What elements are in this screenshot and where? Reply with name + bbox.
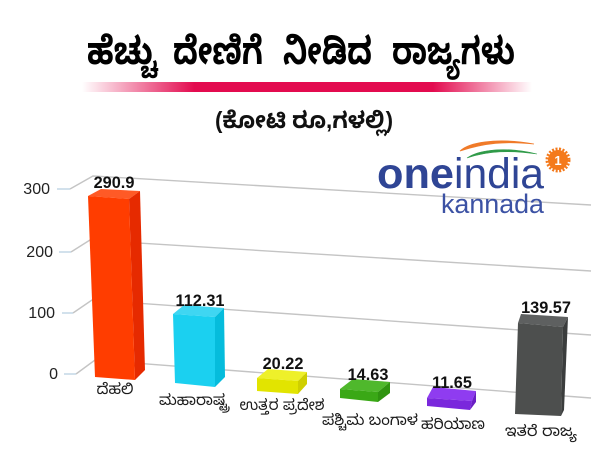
axis ticks: [57, 189, 76, 374]
category labels: ಮಹಾರಾಷ್ಟ್ರ: [159, 392, 230, 413]
bar: Other states 139.57: [515, 299, 571, 416]
bar: Other states 139.57: 139.57: [521, 299, 571, 317]
category labels: ಹರಿಯಾಣ: [421, 416, 485, 433]
category labels: [96, 381, 577, 443]
bar: Delhi 290.9: [88, 174, 145, 380]
title: ರಾಜ್ಯಗಳು: [392, 31, 515, 80]
title underline: [82, 82, 532, 92]
bar: Delhi 290.9: 290.9: [94, 174, 134, 192]
logo badge: 1: [554, 153, 562, 168]
bar: Maharashtra 112.31: [173, 292, 225, 387]
bar: Haryana 11.65: [427, 374, 476, 410]
y axis labels: 100: [28, 305, 55, 322]
bar: Uttar Pradesh 20.22: [257, 355, 307, 394]
chart: [23, 174, 591, 443]
y axis labels: 300: [23, 181, 50, 198]
category labels: ದೆಹಲಿ: [96, 381, 134, 398]
y axis labels: 200: [26, 244, 53, 261]
category labels: ಇತರೆ ರಾಜ್ಯ: [505, 423, 577, 443]
gridlines: [70, 176, 591, 398]
y axis labels: 0: [49, 366, 58, 383]
bar: West Bengal 14.63: [340, 366, 390, 402]
category labels: ಉತ್ತರ ಪ್ರದೇಶ: [240, 397, 324, 415]
title: ದೇಣಿಗೆ: [173, 31, 263, 73]
logo wordmark: india: [454, 150, 544, 198]
title: [87, 31, 515, 80]
y axis labels: [23, 181, 58, 383]
bar: Haryana 11.65: 11.65: [432, 374, 472, 392]
title: ಹೆಚ್ಚು: [87, 31, 158, 79]
category labels: ಪಶ್ಚಿಮ ಬಂಗಾಳ: [322, 412, 418, 431]
logo swooshes: [460, 141, 534, 151]
logo subtitle: kannada: [441, 189, 545, 219]
logo badge: [547, 149, 569, 171]
bar: Maharashtra 112.31: 112.31: [176, 292, 224, 310]
logo wordmark: [377, 150, 544, 198]
bar: Uttar Pradesh 20.22: 20.22: [263, 355, 303, 373]
bar: West Bengal 14.63: 14.63: [348, 366, 388, 384]
subtitle: (ಕೋಟಿ ರೂ,ಗಳಲ್ಲಿ): [215, 107, 393, 137]
title: ನೀಡಿದ: [283, 31, 372, 73]
logo: oneindia kannada: [377, 141, 569, 219]
logo wordmark: one: [377, 150, 454, 198]
